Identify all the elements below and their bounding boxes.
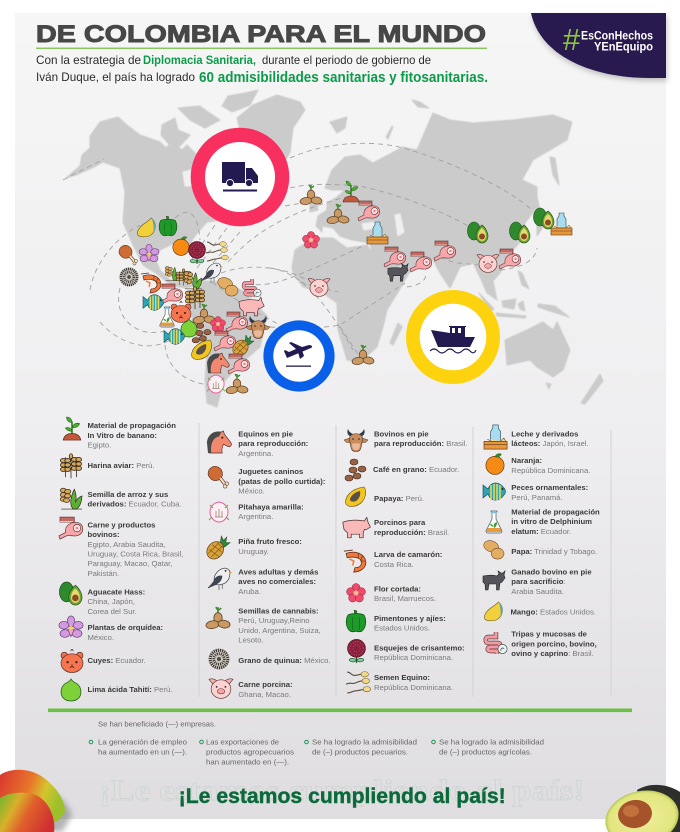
map icon: plant: [343, 181, 359, 202]
legend column 3: [343, 429, 468, 693]
item: bovinos reproduccion: Bovinos en pie: [374, 430, 429, 438]
item: aguacate hass: Corea del Sur.: [88, 607, 137, 616]
item: crisantemo: República Dominicana.: [374, 653, 453, 662]
item: harina aviar: Harina aviar: Perú.: [88, 461, 155, 470]
north america: [66, 117, 270, 288]
map icon: quinoa: [119, 267, 139, 287]
map icon: flower: [303, 232, 319, 248]
intro paragraph: Diplomacia Sanitaria,: [143, 53, 256, 67]
circle: boat transport: [406, 290, 500, 384]
map icon: pig: [477, 255, 499, 272]
item: ganado: Arabia Saudita.: [511, 587, 564, 596]
title: DE COLOMBIA PARA EL MUNDO: [36, 21, 486, 48]
item: delphinium: in vitro de Delphinium: [511, 517, 592, 526]
item: flor: Flor cortada:: [374, 584, 421, 594]
map icon: wheat: [185, 287, 205, 309]
item: lima tahiti: [61, 679, 172, 701]
item: carne porcina: [209, 679, 293, 699]
map icon: bird: [201, 263, 223, 283]
item: equinos: [207, 430, 308, 458]
hashtag badge: #: [563, 22, 581, 57]
map icon: cattle: [388, 264, 408, 281]
item: aves: Aruba.: [238, 587, 261, 596]
item: naranja: Naranja:: [511, 456, 542, 465]
map icon: seeds: [352, 345, 374, 365]
item: equinos: para reproducción:: [238, 439, 308, 448]
item: flor: Brasil, Marruecos.: [374, 594, 436, 603]
map icon: meat: [499, 249, 521, 269]
dashed routes: [63, 143, 537, 385]
map icon: chicken: [119, 245, 138, 265]
greenland: [237, 95, 305, 175]
item: mango: Mango: Estados Unidos.: [510, 608, 596, 616]
item: cuyes: Cuyes: Ecuador.: [88, 656, 146, 665]
benefits text: [89, 720, 544, 766]
map icon: flask: [160, 307, 174, 327]
item: bovinos reproduccion: [344, 429, 468, 452]
item: semilla de arroz: Semilla de arroz y sus: [88, 490, 168, 499]
map icon: pig: [308, 279, 330, 296]
map icon: pitahaya: [207, 375, 225, 393]
item: pimentones: Pimentones y ajíes:: [374, 614, 446, 623]
map icon: semen: [206, 242, 228, 261]
map icon: potato: [216, 276, 238, 296]
ghost slogan: ¡Le estamos cumpliendo al país!: [99, 774, 585, 807]
item: pina: Uruguay.: [238, 547, 269, 556]
bullet: exportaciones: productos agropecuarios: [206, 748, 294, 756]
item: carne bovina: Pakistán.: [88, 569, 119, 578]
item: leche: [484, 425, 589, 449]
map icon: seeds: [226, 374, 248, 394]
circle: plane transport: [263, 320, 335, 392]
hashtag badge: EsConHechos: [581, 30, 653, 42]
item: carne porcina: Ghana, Macao.: [238, 690, 291, 699]
item: carne bovina: Uruguay, Costa Rica, Brasil,: [88, 550, 183, 558]
map icon: guinea pig: [171, 302, 191, 322]
uk: [310, 198, 318, 212]
item: carne bovina: Egipto, Arabia Saudita,: [88, 540, 166, 549]
map icon: rice plant: [184, 272, 202, 289]
item: semen equino: [346, 672, 453, 693]
hashtag badge: YEnEquipo: [594, 42, 653, 54]
item: carne bovina: Paraguay, Macao, Qatar,: [88, 559, 172, 568]
item: cuyes: [61, 649, 146, 673]
world map: [66, 90, 603, 407]
map icon: mango: [137, 218, 156, 237]
map icon: meat: [434, 241, 456, 261]
map icon: meat: [161, 284, 183, 304]
map icons: americas: [119, 216, 270, 394]
map icon: orchid: [139, 244, 159, 262]
intro paragraph: [36, 53, 488, 86]
bullet: empleo: ha aumentado en un (—).: [98, 748, 187, 756]
item: aves: Aves adultas y demás: [238, 568, 318, 576]
item: ganado: Ganado bovino en pie: [511, 568, 592, 576]
item: cannabis: [205, 606, 321, 644]
item: mango: [484, 602, 596, 621]
eurasia: [316, 113, 572, 300]
item: pitahaya: [209, 502, 304, 522]
inland seas: [183, 170, 404, 236]
item: material in vitro banano: In Vitro de banano:: [88, 431, 157, 440]
map icon: wheat: [176, 269, 191, 286]
map icon: orange: [173, 237, 189, 255]
bullet: agricolas: [432, 738, 544, 756]
intro paragraph: Con la estrategia de: [36, 53, 141, 67]
legend column 2: [203, 430, 331, 699]
item: aguacate hass: Aguacate Hass:: [88, 588, 145, 596]
map icon: meat: [214, 331, 236, 351]
bullet: empleo: [89, 738, 187, 756]
item: porcinos: reproducción: Brasil.: [374, 528, 449, 537]
item: delphinium: Material de propagación: [511, 508, 600, 516]
item: tripas: origen porcino, bovino,: [511, 640, 597, 648]
bullet: agricolas: de (–) productos agrícolas.: [439, 748, 532, 756]
item: material in vitro banano: Egipto.: [88, 440, 111, 450]
map icon: rice: [165, 266, 180, 281]
item: aves: [208, 568, 318, 596]
item: ganado: [483, 568, 592, 596]
item: porcinos: [343, 517, 449, 538]
item: delphinium: [486, 508, 600, 536]
item: cannabis: Lesoto.: [238, 636, 264, 644]
map icon: guts: [244, 279, 261, 297]
item: camaron: [344, 550, 442, 572]
item: cannabis: Perú, Uruguay,Reino: [238, 616, 310, 625]
map icon: avocado: [534, 208, 554, 229]
slogan: ¡Le estamos cumpliendo al país!: [179, 785, 506, 808]
intro paragraph: durante el periodo de gobierno de: [262, 53, 431, 67]
item: peces: [483, 483, 588, 502]
item: tripas: [486, 630, 597, 658]
map icon: meat: [358, 201, 380, 221]
item: leche: lácteos: Japón, Israel.: [511, 439, 589, 448]
item: camaron: Costa Rica.: [374, 560, 414, 569]
item: camaron: Larva de camarón:: [374, 550, 442, 559]
map icon: milk: [367, 222, 388, 244]
map icon: chrysanthemum: [188, 242, 206, 264]
item: delphinium: elatum: Ecuador.: [511, 527, 571, 536]
item: cannabis: Semillas de cannabis:: [238, 606, 319, 616]
item: cafe: Café en grano: Ecuador.: [373, 465, 459, 474]
item: orquidea: Plantas de orquídea:: [88, 623, 163, 632]
bullet: empleo: La generación de empleo: [98, 738, 187, 746]
item: crisantemo: [348, 639, 465, 663]
map icon: horse: [207, 353, 229, 373]
africa: [292, 238, 403, 362]
item: papa: Papa: Trinidad y Tobago.: [511, 547, 597, 556]
green divider: [48, 708, 632, 712]
map icon: avocado: [468, 222, 488, 243]
item: equinos: Argentina.: [238, 449, 273, 458]
item: quinua: Grano de quinua: México.: [238, 656, 331, 665]
item: juguetes caninos: [208, 466, 325, 496]
bullet: exportaciones: Las exportaciones de: [206, 738, 279, 746]
mango photo: [0, 770, 72, 832]
item: tripas: ovino y caprino: Brasil.: [511, 649, 594, 658]
bullet: exportaciones: [200, 738, 294, 766]
item: pina: [203, 536, 302, 562]
item: juguetes caninos: México.: [238, 486, 265, 496]
item: material in vitro banano: [63, 417, 176, 450]
madagascar: [390, 323, 402, 345]
title underline: [36, 48, 487, 49]
item: quinua: [208, 648, 331, 670]
item: semilla de arroz: derivados: Ecuador, Cuba.: [88, 500, 182, 508]
item: peces: Peces ornamentales:: [511, 483, 588, 492]
item: aguacate hass: [59, 582, 145, 616]
item: orquidea: México.: [88, 633, 114, 642]
map icon: milk: [551, 213, 572, 235]
map icon: coffee: [192, 323, 211, 343]
item: papaya: [346, 487, 424, 506]
avocado photo: [600, 784, 680, 832]
item: carne bovina: [59, 517, 183, 578]
benefits text: Se han beneficiado (—) empresas.: [98, 720, 216, 728]
map icon: meat: [410, 252, 432, 272]
legend column 4: [482, 425, 600, 658]
map icon: seeds: [193, 304, 215, 324]
map icon: shrimp: [141, 273, 161, 293]
map icon: pepper: [159, 216, 177, 236]
map icon: fish: [143, 295, 163, 310]
item: crisantemo: Esquejes de crisantemo:: [374, 644, 465, 652]
bullet: exportaciones: han aumentado en (—).: [206, 758, 289, 766]
item: tripas: Tripas y mucosas de: [511, 630, 588, 638]
item: leche: Leche y derivados: [511, 430, 578, 438]
item: peces: Perú, Panamá.: [511, 493, 563, 502]
map icons: europe africa asia: [300, 181, 572, 365]
item: ganado: para sacrificio:: [511, 577, 566, 586]
item: material in vitro banano: Material de propagación: [88, 421, 176, 430]
iceland: [330, 117, 347, 133]
item: aguacate hass: China, Japón,: [88, 597, 135, 606]
map icon: lime: [181, 319, 197, 337]
item: papa: [482, 539, 597, 559]
item: carne bovina: bovinos:: [88, 530, 120, 539]
bullet: pecuarios: de (–) productos pecuarios.: [312, 748, 408, 756]
map icon: meat: [226, 312, 248, 332]
item: pitahaya: Argentina.: [238, 512, 273, 521]
map icon: seeds: [327, 204, 349, 224]
item: carne bovina: Carne y productos: [88, 520, 155, 530]
item: pimentones: [346, 610, 446, 632]
map icon: pig body: [239, 297, 264, 316]
map icon: seeds: [300, 185, 322, 205]
bullet: pecuarios: Se ha logrado la admisibilidad: [312, 738, 417, 746]
item: papaya: Papaya: Perú.: [374, 494, 424, 503]
circle: truck transport: [191, 128, 289, 226]
australia: [505, 322, 570, 389]
map icon: meat: [384, 247, 406, 267]
item: carne porcina: Carne porcina:: [238, 680, 293, 689]
item: semen equino: República Dominicana.: [374, 683, 453, 692]
map icon: fish: [164, 329, 184, 344]
map icon: pineapple: [230, 335, 254, 359]
item: semen equino: Semen Equino:: [374, 673, 430, 682]
intro paragraph: Iván Duque, el país ha logrado: [36, 70, 195, 84]
hashtag badge: [531, 13, 667, 81]
new zealand: [581, 374, 603, 404]
map icon: meat: [228, 354, 250, 374]
item: equinos: Equinos en pie: [238, 430, 294, 438]
map icon: papaya: [192, 340, 212, 359]
south america: [191, 281, 267, 407]
item: flor: [347, 584, 436, 603]
legend column 1: [59, 417, 183, 701]
item: cannabis: Unido, Argentina, Suiza,: [238, 626, 321, 635]
japan kamchatka islands: [386, 100, 569, 318]
item: cafe: [345, 459, 459, 481]
item: pitahaya: Pitahaya amarilla:: [238, 502, 304, 512]
item: porcinos: Porcinos para: [374, 518, 426, 527]
item: juguetes caninos: (patas de pollo curtida):: [238, 477, 325, 486]
item: harina aviar: [60, 454, 155, 478]
item: orquidea: [59, 616, 163, 642]
item: semilla de arroz: [60, 488, 182, 509]
item: pimentones: Estados Unidos.: [374, 624, 430, 632]
bullet: agricolas: Se ha logrado la admisibilidad: [439, 738, 544, 746]
canadian islands: [161, 90, 258, 146]
map icon: avocado: [510, 222, 530, 243]
item: bovinos reproduccion: para reproducción: Brasil.: [374, 439, 468, 448]
item: aves: aves no comerciales:: [238, 577, 316, 586]
map icon: flower: [210, 316, 226, 331]
item: naranja: República Dominicana.: [511, 466, 590, 475]
bullet: pecuarios: [305, 738, 417, 756]
item: juguetes caninos: Juguetes caninos: [238, 467, 303, 476]
map icon: bull: [246, 316, 270, 338]
item: lima tahiti: Lima ácida Tahití: Perú.: [88, 685, 172, 694]
item: pina: Piña fruto fresco:: [238, 537, 302, 546]
item: naranja: [486, 454, 590, 475]
intro paragraph: 60 admisibilidades sanitarias y fitosanitarias.: [199, 70, 488, 86]
